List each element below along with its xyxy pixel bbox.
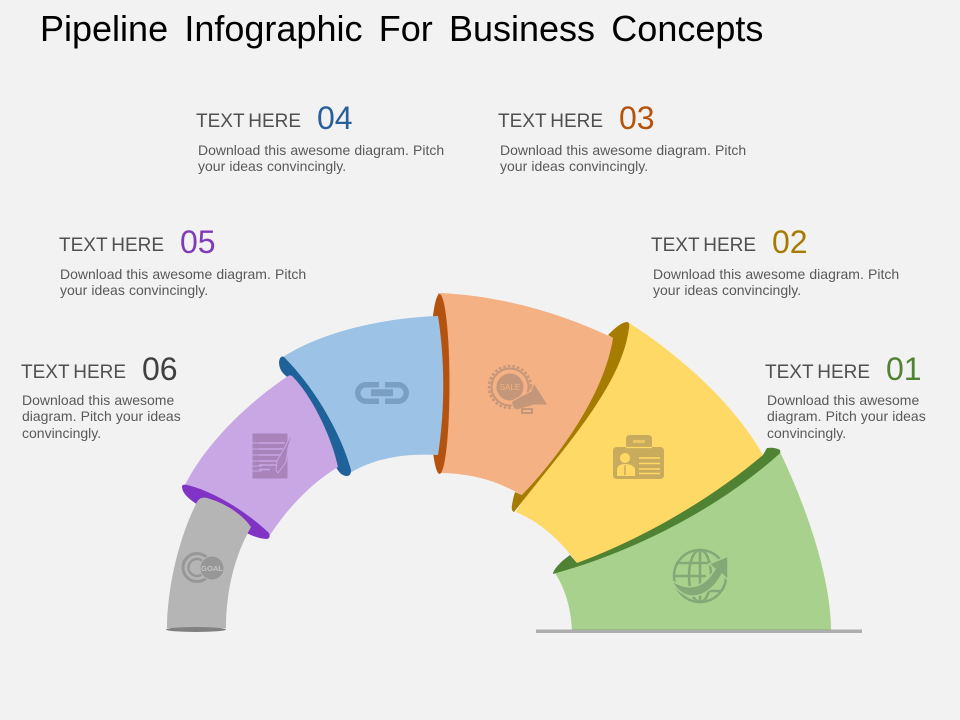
text block 04: TEXT HERE: [196, 111, 301, 132]
text block 01: diagram. Pitch your ideas: [767, 408, 926, 424]
text block 02: [651, 224, 899, 298]
pipe segment 03: orange: [430, 293, 613, 495]
text block 03: your ideas convincingly.: [500, 158, 648, 174]
text block 06: diagram. Pitch your ideas: [22, 408, 181, 424]
text block 02: 02: [772, 224, 808, 260]
base line: [536, 630, 862, 633]
icon: goal target: GOAL: [201, 564, 223, 573]
text block 06: 06: [142, 351, 178, 387]
pipe segment 06: grey: [166, 498, 251, 632]
pipe segment 04: blue: [279, 316, 443, 476]
text block 04: your ideas convincingly.: [198, 158, 346, 174]
icon: globe with arrow: [671, 550, 728, 602]
text block 06: Download this awesome: [22, 392, 174, 408]
icon: notebook and pen: [252, 431, 293, 478]
text block 04: 04: [317, 100, 353, 136]
text block 03: 03: [619, 100, 655, 136]
icon: sale badge and megaphone: SALE: [500, 383, 520, 392]
text block 04: [196, 100, 444, 174]
text block 03: TEXT HERE: [498, 111, 603, 132]
title: Pipeline Infographic For Business Concepts: [40, 8, 763, 49]
text block 05: TEXT HERE: [59, 235, 164, 256]
text block 05: 05: [180, 224, 216, 260]
text block 02: Download this awesome diagram. Pitch: [653, 266, 899, 282]
text block 05: your ideas convincingly.: [60, 282, 208, 298]
text block 01: convincingly.: [767, 425, 846, 441]
text block 01: 01: [886, 351, 922, 387]
icon: chain link: [358, 385, 406, 401]
text block 06: TEXT HERE: [21, 362, 126, 383]
text block 01: Download this awesome: [767, 392, 919, 408]
pipe segment 02: yellow: [512, 322, 763, 563]
text block 06: convincingly.: [22, 425, 101, 441]
text block 04: Download this awesome diagram. Pitch: [198, 142, 444, 158]
pipe segment 01: green: [553, 448, 831, 630]
text block 05: Download this awesome diagram. Pitch: [60, 266, 306, 282]
icon: ID badge: [613, 435, 664, 479]
pipe segment 05: purple: [182, 375, 338, 539]
text block 03: Download this awesome diagram. Pitch: [500, 142, 746, 158]
pipe opening ellipse: [166, 627, 226, 632]
text block 02: your ideas convincingly.: [653, 282, 801, 298]
text block 05: [59, 224, 306, 298]
text block 06: [21, 351, 181, 441]
text block 02: TEXT HERE: [651, 235, 756, 256]
icon: sale badge and megaphone: [489, 366, 548, 413]
text block 01: TEXT HERE: [765, 362, 870, 383]
text block 03: [498, 100, 746, 174]
text block 01: [765, 351, 926, 441]
